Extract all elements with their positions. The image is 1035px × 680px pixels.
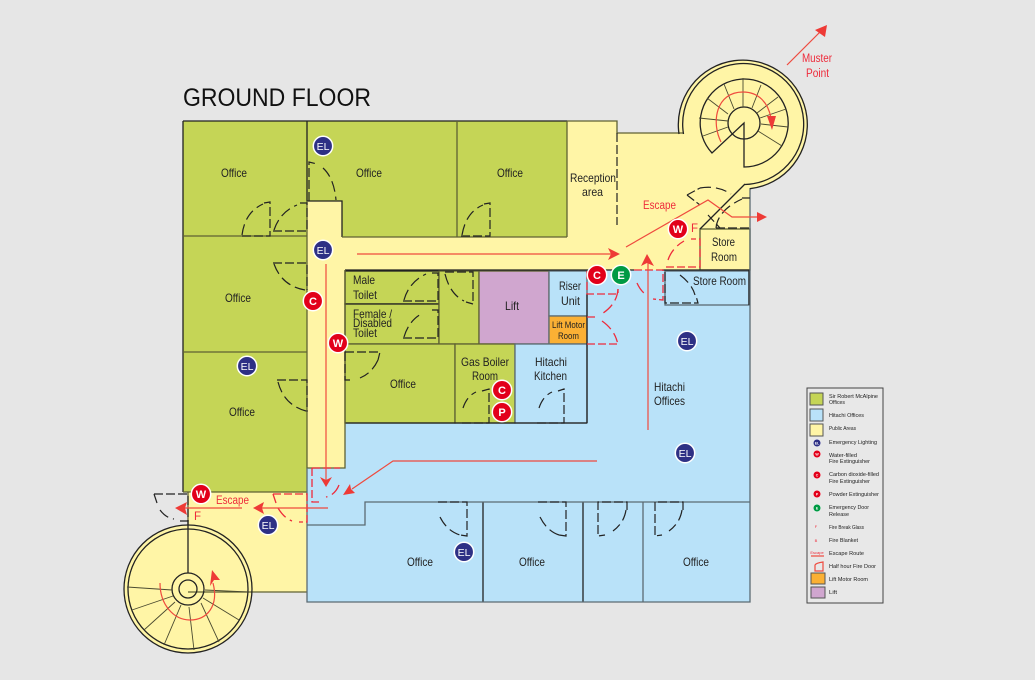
Hitachi offices area: [307, 270, 750, 602]
room labels: Toilet: [353, 288, 378, 302]
room labels: Female /: [353, 307, 393, 321]
lower spiral stair: [124, 520, 252, 653]
riser unit: [549, 271, 587, 316]
room labels: Kitchen: [534, 369, 567, 383]
room labels: Store Room: [693, 274, 746, 288]
legend symbols: Escape: [810, 550, 824, 555]
bottom west arrow: [262, 507, 328, 509]
corridor south arrow: [325, 264, 327, 480]
room labels: Reception: [570, 171, 616, 185]
room labels: Office: [519, 555, 545, 569]
room labels: Office: [221, 166, 247, 180]
markers: emergency lighting: EL: [241, 361, 254, 373]
room labels: Riser: [559, 279, 581, 293]
title: GROUND FLOOR: [183, 84, 371, 112]
room labels: Toilet: [353, 326, 378, 340]
panel: floor areas: [124, 60, 808, 653]
room labels: Store: [712, 235, 735, 249]
markers: emergency lighting: EL: [458, 547, 471, 559]
markers: emergency lighting: EL: [681, 336, 694, 348]
legend symbols: W: [815, 452, 819, 456]
markers: extinguishers and door release: [191, 219, 688, 504]
markers: extinguishers and door release: E: [617, 270, 625, 282]
main corridor arrow: [357, 253, 612, 255]
markers: extinguishers and door release: C: [309, 296, 317, 308]
room labels: Room: [711, 250, 737, 264]
public area lower left: [188, 492, 307, 592]
markers: emergency lighting: [237, 136, 697, 562]
Hitachi kitchen: [515, 344, 587, 423]
lift motor room: [549, 316, 587, 344]
markers: extinguishers and door release: C: [498, 385, 506, 397]
office room centre: [345, 344, 455, 423]
legend labels: [829, 394, 879, 596]
room labels: Room: [558, 331, 579, 341]
legend labels: Fire Extinguisher: [829, 479, 870, 485]
doors: [154, 162, 750, 536]
legend labels: Sir Robert McAlpine: [829, 394, 878, 400]
panel: inner rooms: [345, 229, 750, 423]
legend panel: [807, 388, 883, 603]
escape route arrows: [175, 25, 827, 515]
male toilet room: [345, 271, 439, 304]
room labels: Office: [356, 166, 382, 180]
legend labels: Release: [829, 512, 849, 518]
gas boiler room: [455, 344, 515, 423]
route to east exit: [626, 200, 760, 247]
legend labels: Emergency Door: [829, 505, 869, 511]
markers: extinguishers and door release: W: [333, 338, 344, 350]
escape labels: F: [691, 223, 698, 235]
stair direction arrow: [716, 92, 771, 142]
stair direction arrow: [160, 583, 215, 620]
room labels: Lift: [505, 299, 520, 313]
room labels: Office: [390, 377, 416, 391]
store room yellow: [700, 229, 750, 270]
markers: extinguishers and door release: W: [196, 489, 207, 501]
Hitachi offices west arrow: [352, 461, 597, 489]
legend symbols: [810, 439, 824, 571]
legend labels: Carbon dioxide-filled: [829, 472, 879, 478]
legend labels: Public Areas: [829, 426, 856, 432]
legend labels: Fire Break Glass: [829, 525, 864, 531]
room labels: Male: [353, 273, 375, 287]
walls: [183, 121, 750, 602]
room labels: [221, 166, 746, 569]
legend labels: Escape Route: [829, 551, 864, 557]
escape labels: Escape: [216, 495, 249, 507]
room labels: Lift Motor: [552, 320, 585, 330]
legend labels: Lift Motor Room: [829, 577, 868, 583]
muster point arrow: [787, 31, 821, 65]
legend labels: Water-filled: [829, 453, 857, 459]
markers: emergency lighting: EL: [262, 520, 275, 532]
lobby room: [439, 271, 479, 344]
room labels: Office: [683, 555, 709, 569]
upper spiral stair: [678, 60, 807, 189]
legend symbols: P: [816, 492, 819, 496]
markers: extinguishers and door release: C: [593, 270, 601, 282]
legend symbols: EL: [815, 441, 820, 445]
legend symbols: B: [815, 538, 818, 543]
room labels: Office: [229, 405, 255, 419]
markers: extinguishers and door release: P: [498, 407, 506, 419]
west exit arrow: [185, 507, 242, 509]
room labels: Room: [472, 369, 498, 383]
markers: emergency lighting: EL: [679, 448, 692, 460]
escape labels: [194, 53, 832, 523]
markers: emergency lighting: EL: [317, 245, 330, 257]
lift: [479, 271, 549, 344]
legend labels: Powder Extinguisher: [829, 492, 879, 498]
legend symbols: F: [815, 524, 818, 529]
legend labels: Fire Extinguisher: [829, 459, 870, 465]
room labels: Hitachi: [535, 355, 567, 369]
room labels: Offices: [654, 394, 685, 408]
room labels: area: [582, 185, 603, 199]
half hour fire doors: [273, 239, 700, 522]
escape labels: F: [194, 511, 201, 523]
female toilet room: [345, 304, 439, 344]
room labels: Office: [497, 166, 523, 180]
legend labels: Hitachi Offices: [829, 413, 865, 419]
lower stair tower floor: [124, 525, 252, 653]
legend labels: Fire Blanket: [829, 538, 859, 544]
markers: emergency lighting: EL: [317, 141, 330, 153]
markers: extinguishers and door release: W: [673, 224, 684, 236]
room labels: Gas Boiler: [461, 355, 509, 369]
legend symbols: E: [816, 506, 819, 510]
room labels: Hitachi: [654, 380, 685, 394]
legend swatches: [810, 393, 825, 598]
legend labels: Emergency Lighting: [829, 440, 877, 446]
legend labels: Lift: [829, 590, 838, 596]
store room blue: [665, 271, 749, 305]
legend labels: Offices: [829, 400, 846, 406]
escape labels: Muster: [802, 53, 832, 65]
Hitachi offices north arrow: [647, 262, 649, 430]
legend labels: Half hour Fire Door: [829, 564, 876, 570]
upper stair tower floor: [679, 60, 808, 189]
legend symbols: C: [816, 473, 819, 477]
room labels: Office: [225, 291, 251, 305]
public areas: [307, 121, 750, 468]
room labels: Office: [407, 555, 433, 569]
escape labels: Escape: [643, 200, 676, 212]
room labels: Unit: [561, 294, 581, 308]
escape labels: Point: [806, 68, 830, 80]
room labels: Disabled: [353, 316, 392, 330]
legend: [807, 388, 883, 603]
Sir Robert McAlpine offices area: [183, 121, 567, 492]
